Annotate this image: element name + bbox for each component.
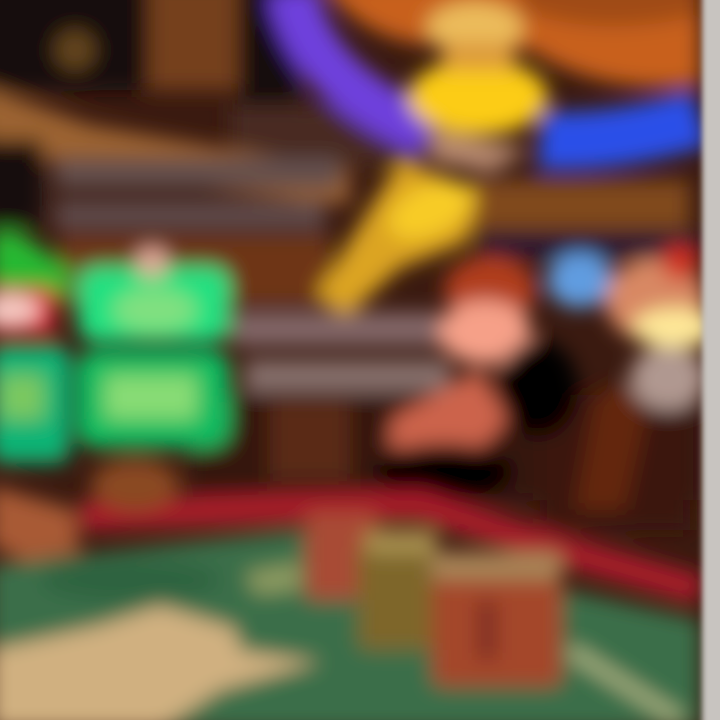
purple arc bbox=[292, 0, 430, 132]
gray middle text band bbox=[232, 312, 450, 392]
yellow diagonal light bbox=[316, 160, 480, 318]
lower wall bbox=[190, 395, 700, 530]
black figure shape bbox=[498, 340, 578, 436]
blue orb bbox=[547, 252, 613, 308]
felt table bbox=[0, 530, 700, 720]
gray upper text band bbox=[55, 158, 340, 230]
ceiling: dark area with beams bbox=[0, 0, 420, 225]
green slot machine left bbox=[0, 230, 72, 463]
orange ceiling dome bbox=[320, 0, 700, 87]
mid-wall brown bbox=[60, 180, 700, 305]
table line bbox=[570, 650, 680, 720]
cream star on felt bbox=[0, 562, 320, 720]
red table edge bbox=[80, 505, 700, 590]
dice stack bbox=[305, 512, 562, 687]
blue band bbox=[540, 118, 700, 141]
green slot machine center bbox=[76, 246, 230, 448]
golden lamp bbox=[408, 42, 548, 172]
right edge strip bbox=[702, 0, 720, 720]
figure: red-haired character bbox=[377, 256, 536, 500]
felt shadow patch bbox=[40, 558, 220, 602]
brown chips left bbox=[0, 459, 179, 562]
right glowing figure bbox=[575, 244, 717, 510]
